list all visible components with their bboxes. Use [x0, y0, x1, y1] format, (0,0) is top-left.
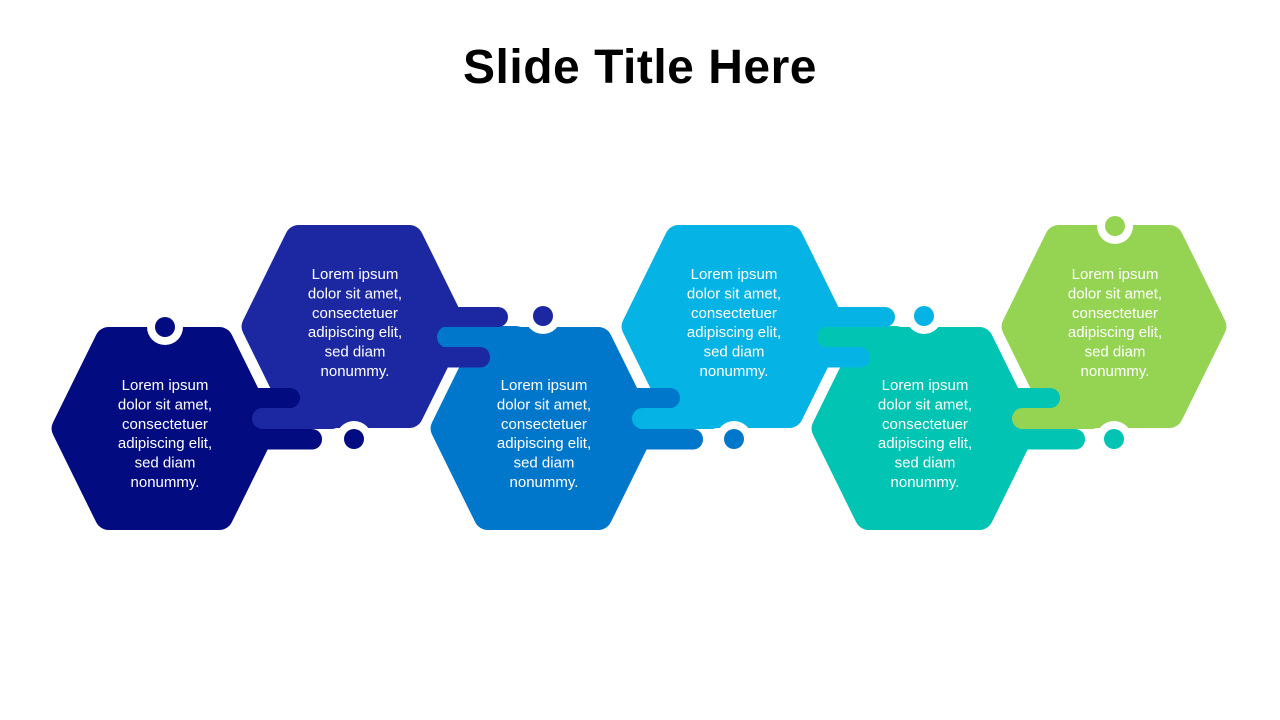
connector 1-2 — [220, 388, 372, 457]
text 5: consectetuer — [882, 416, 968, 433]
text 1: sed diam — [135, 455, 195, 472]
text 4: adipiscing elit, — [687, 324, 781, 341]
text 4: dolor sit amet, — [687, 285, 781, 302]
text 4: consectetuer — [691, 305, 777, 322]
hexagon 4 — [636, 239, 832, 414]
text 2: dolor sit amet, — [308, 285, 402, 302]
text 6: nonummy. — [1081, 363, 1149, 380]
hexagon 5 — [826, 341, 1022, 516]
text 1: consectetuer — [122, 416, 208, 433]
hexagon 3 — [445, 341, 641, 516]
text 6: Lorem ipsum — [1072, 266, 1158, 283]
connector 2-3 — [410, 298, 561, 368]
text 3: dolor sit amet, — [497, 396, 591, 413]
text 2: sed diam — [325, 344, 385, 361]
connector 5-6 — [980, 388, 1132, 457]
text 6: consectetuer — [1072, 305, 1158, 322]
text 1: Lorem ipsum — [122, 377, 208, 394]
hexagon 2 — [256, 239, 452, 414]
text 2: consectetuer — [312, 305, 398, 322]
text 5: Lorem ipsum — [882, 377, 968, 394]
connector 4-5 — [790, 298, 942, 368]
hexagon 1 — [66, 341, 262, 516]
text 3: nonummy. — [510, 474, 578, 491]
text 6: dolor sit amet, — [1068, 285, 1162, 302]
text 2: adipiscing elit, — [308, 324, 402, 341]
text 6: sed diam — [1085, 344, 1145, 361]
title: Slide Title Here — [463, 41, 817, 94]
text 1: adipiscing elit, — [118, 435, 212, 452]
connector 3-4 — [600, 388, 752, 457]
text 3: Lorem ipsum — [501, 377, 587, 394]
text 5: sed diam — [895, 455, 955, 472]
text 4: nonummy. — [700, 363, 768, 380]
dot: hexagon 6 top — [1097, 208, 1133, 244]
text 6: adipiscing elit, — [1068, 324, 1162, 341]
text 5: dolor sit amet, — [878, 396, 972, 413]
hexagon 6 — [1016, 239, 1212, 414]
text 4: sed diam — [704, 344, 764, 361]
text 2: Lorem ipsum — [312, 266, 398, 283]
text 2: nonummy. — [321, 363, 389, 380]
dot: hexagon 1 top — [147, 309, 183, 345]
text 5: adipiscing elit, — [878, 435, 972, 452]
text 3: sed diam — [514, 455, 574, 472]
text 3: adipiscing elit, — [497, 435, 591, 452]
text 3: consectetuer — [501, 416, 587, 433]
text 4: Lorem ipsum — [691, 266, 777, 283]
text 5: nonummy. — [891, 474, 959, 491]
text 1: nonummy. — [131, 474, 199, 491]
text 1: dolor sit amet, — [118, 396, 212, 413]
